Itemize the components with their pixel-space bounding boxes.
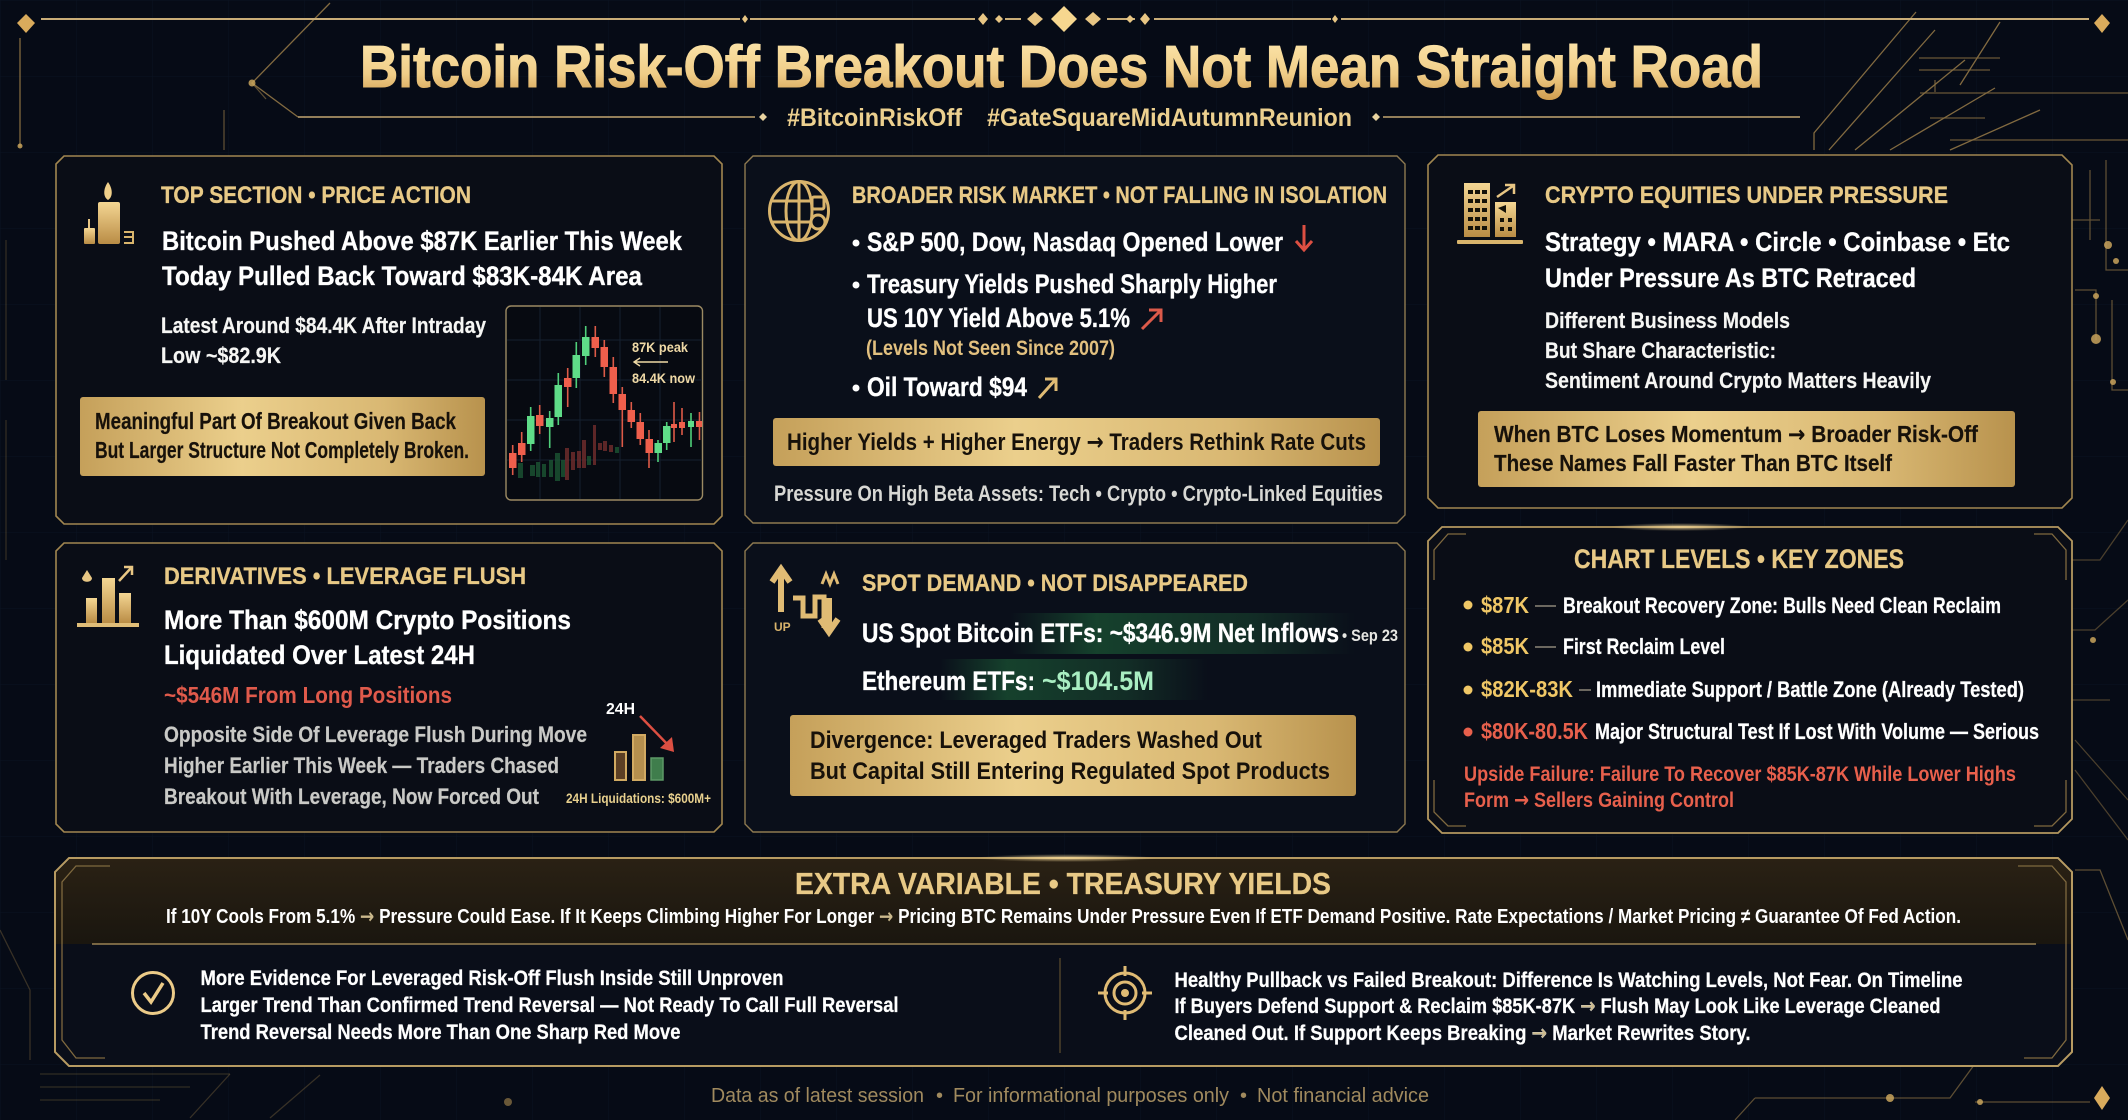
left takeaway: Trend Reversal Needs More Than One Sharp Red Move — [200, 1021, 680, 1044]
footer disclaimer: Not financial advice — [1257, 1085, 1429, 1107]
market bullets: (Levels Not Seen Since 2007) — [866, 337, 1115, 360]
long positions stat: ~$546M From Long Positions — [164, 682, 452, 708]
body text: Sentiment Around Crypto Matters Heavily — [1545, 368, 1932, 393]
latest price text: Low ~$82.9K — [161, 343, 281, 368]
level: 85K — [1464, 633, 1725, 659]
panel: treasury yields — [55, 854, 2072, 1066]
market bullets: S&P 500, Dow, Nasdaq Opened Lower — [867, 227, 1283, 257]
callout: But Larger Structure Not Completely Broken. — [95, 437, 469, 463]
etf flows — [862, 613, 1398, 700]
note: Pressure On High Beta Assets: Tech • Crypto • Crypto-Linked Equities — [774, 481, 1383, 506]
header ornament line — [17, 6, 2110, 33]
headline — [1545, 227, 2010, 293]
upside failure note: Upside Failure: Failure To Recover $85K-87K While Lower Highs — [1464, 762, 2016, 786]
level: 82K-83K: $82K-83K — [1481, 676, 1573, 702]
mini liquidation chart — [566, 701, 711, 806]
candlestick chart: 87K peak — [632, 339, 688, 355]
callout — [80, 397, 485, 476]
hashtag row: #GateSquareMidAutumnReunion — [987, 104, 1352, 132]
callout: Higher Yields + Higher Energy → Traders Rethink Rate Cuts — [787, 428, 1366, 456]
market bullets: US 10Y Yield Above 5.1% — [867, 303, 1130, 333]
footer disclaimer — [711, 1085, 1429, 1107]
icon: candles — [84, 182, 133, 244]
footer disclaimer: Data as of latest session — [711, 1085, 924, 1107]
body text: Breakout With Leverage, Now Forced Out — [164, 784, 540, 809]
level: 80K-80.5K: Major Structural Test If Lost With Volume — Serious — [1595, 719, 2039, 744]
body text: But Share Characteristic: — [1545, 338, 1776, 363]
right takeaway: If Buyers Defend Support & Reclaim $85K-87K → Flush May Look Like Leverage Cleaned — [1174, 994, 1940, 1018]
right takeaway: Cleaned Out. If Support Keeps Breaking → Market Rewrites Story. — [1174, 1021, 1750, 1045]
title: Bitcoin Risk-Off Breakout Does Not Mean Straight Road — [360, 34, 1763, 100]
hashtag row — [298, 104, 1800, 132]
mini liquidation chart: 24H Liquidations: $600M+ — [566, 790, 711, 806]
left takeaway: Larger Trend Than Confirmed Trend Reversal — Not Ready To Call Full Reversal — [200, 994, 898, 1017]
market bullets — [852, 225, 1312, 402]
etf flows: ~$104.5M — [1042, 666, 1154, 696]
etf flows: • Sep 23 — [1342, 626, 1398, 645]
headline: Strategy • MARA • Circle • Coinbase • Etc — [1545, 227, 2010, 257]
left takeaway — [200, 967, 898, 1044]
body text — [1545, 308, 1932, 393]
level: 80K-80.5K: $80K-80.5K — [1481, 718, 1588, 744]
level: 85K: $85K — [1481, 633, 1529, 659]
upside failure note — [1464, 762, 2016, 813]
level: 80K-80.5K — [1464, 718, 2039, 744]
footer disclaimer: • — [1240, 1085, 1247, 1107]
callout — [1478, 411, 2015, 487]
footer disclaimer: For informational purposes only — [953, 1085, 1229, 1107]
body text: Different Business Models — [1545, 308, 1790, 333]
level: 87K: Breakout Recovery Zone: Bulls Need Clean Reclaim — [1563, 593, 2001, 618]
latest price text — [161, 313, 487, 368]
callout: But Capital Still Entering Regulated Spot Products — [810, 758, 1330, 785]
callout: When BTC Loses Momentum → Broader Risk-Off — [1494, 421, 1978, 448]
icon: check — [132, 972, 174, 1014]
heading: CHART LEVELS • KEY ZONES — [1574, 544, 1904, 574]
body text: Opposite Side Of Leverage Flush During Move — [164, 722, 587, 747]
footer disclaimer: • — [936, 1085, 943, 1107]
panel: spot demand — [745, 543, 1405, 832]
heading: EXTRA VARIABLE • TREASURY YIELDS — [795, 866, 1331, 901]
headline — [162, 226, 683, 291]
icon: flow arrows — [772, 569, 838, 634]
left takeaway: More Evidence For Leveraged Risk-Off Flush Inside Still Unproven — [200, 967, 784, 990]
level: 87K: $87K — [1481, 592, 1529, 618]
headline: Today Pulled Back Toward $83K-84K Area — [162, 261, 643, 291]
level: 82K-83K: Immediate Support / Battle Zone (Already Tested) — [1596, 677, 2024, 702]
callout — [773, 418, 1380, 466]
panel: broader risk market — [745, 156, 1405, 523]
headline: Liquidated Over Latest 24H — [164, 640, 475, 670]
callout: Meaningful Part Of Breakout Given Back — [95, 408, 456, 434]
right takeaway — [1174, 969, 1962, 1045]
heading: DERIVATIVES • LEVERAGE FLUSH — [164, 563, 526, 590]
level: 85K: First Reclaim Level — [1563, 634, 1725, 659]
icon: flow arrows: UP — [774, 620, 791, 634]
market bullets: Treasury Yields Pushed Sharply Higher — [867, 269, 1277, 299]
panel: crypto equities — [1428, 155, 2072, 508]
panel: derivatives — [56, 543, 722, 832]
mini liquidation chart: 24H — [606, 701, 635, 718]
icon: buildings — [1457, 183, 1523, 244]
headline: Bitcoin Pushed Above $87K Earlier This Week — [162, 226, 683, 256]
market bullets: Oil Toward $94 — [867, 372, 1027, 402]
panel: price action — [56, 156, 722, 524]
heading: SPOT DEMAND • NOT DISAPPEARED — [862, 570, 1248, 597]
latest price text: Latest Around $84.4K After Intraday — [161, 313, 487, 338]
icon: leverage bars — [77, 567, 139, 627]
level: 87K — [1464, 592, 2001, 618]
callout: Divergence: Leveraged Traders Washed Out — [810, 727, 1262, 754]
headline: More Than $600M Crypto Positions — [164, 605, 571, 635]
candlestick chart: 84.4K now — [632, 370, 695, 386]
callout — [790, 715, 1356, 796]
level: 82K-83K — [1464, 676, 2024, 702]
panel: chart levels — [1428, 523, 2072, 833]
summary line: If 10Y Cools From 5.1% → Pressure Could Ease. If It Keeps Climbing Higher For Longer → Pricing BTC Remains Under Pressure Even If ETF Demand Positive. Rate Expectations / Market Pricing ≠ Guarantee Of Fed Action. — [166, 904, 1961, 928]
heading: BROADER RISK MARKET • NOT FALLING IN ISOLATION — [852, 182, 1387, 209]
right takeaway: Healthy Pullback vs Failed Breakout: Difference Is Watching Levels, Not Fear. On Timeline — [1174, 969, 1962, 992]
heading: CRYPTO EQUITIES UNDER PRESSURE — [1545, 182, 1948, 209]
heading: TOP SECTION • PRICE ACTION — [161, 182, 471, 209]
candlestick chart — [506, 306, 702, 500]
callout: These Names Fall Faster Than BTC Itself — [1494, 450, 1892, 476]
etf flows: US Spot Bitcoin ETFs: ~$346.9M Net Inflows — [862, 618, 1339, 648]
upside failure note: Form → Sellers Gaining Control — [1464, 788, 1734, 813]
headline: Under Pressure As BTC Retraced — [1545, 263, 1916, 293]
icon: globe — [770, 181, 828, 241]
hashtag row: #BitcoinRiskOff — [787, 104, 963, 132]
etf flows: Ethereum ETFs: — [862, 666, 1035, 696]
headline — [164, 605, 571, 670]
body text: Higher Earlier This Week — Traders Chased — [164, 753, 559, 778]
body text — [164, 722, 587, 809]
icon: target — [1098, 966, 1152, 1020]
